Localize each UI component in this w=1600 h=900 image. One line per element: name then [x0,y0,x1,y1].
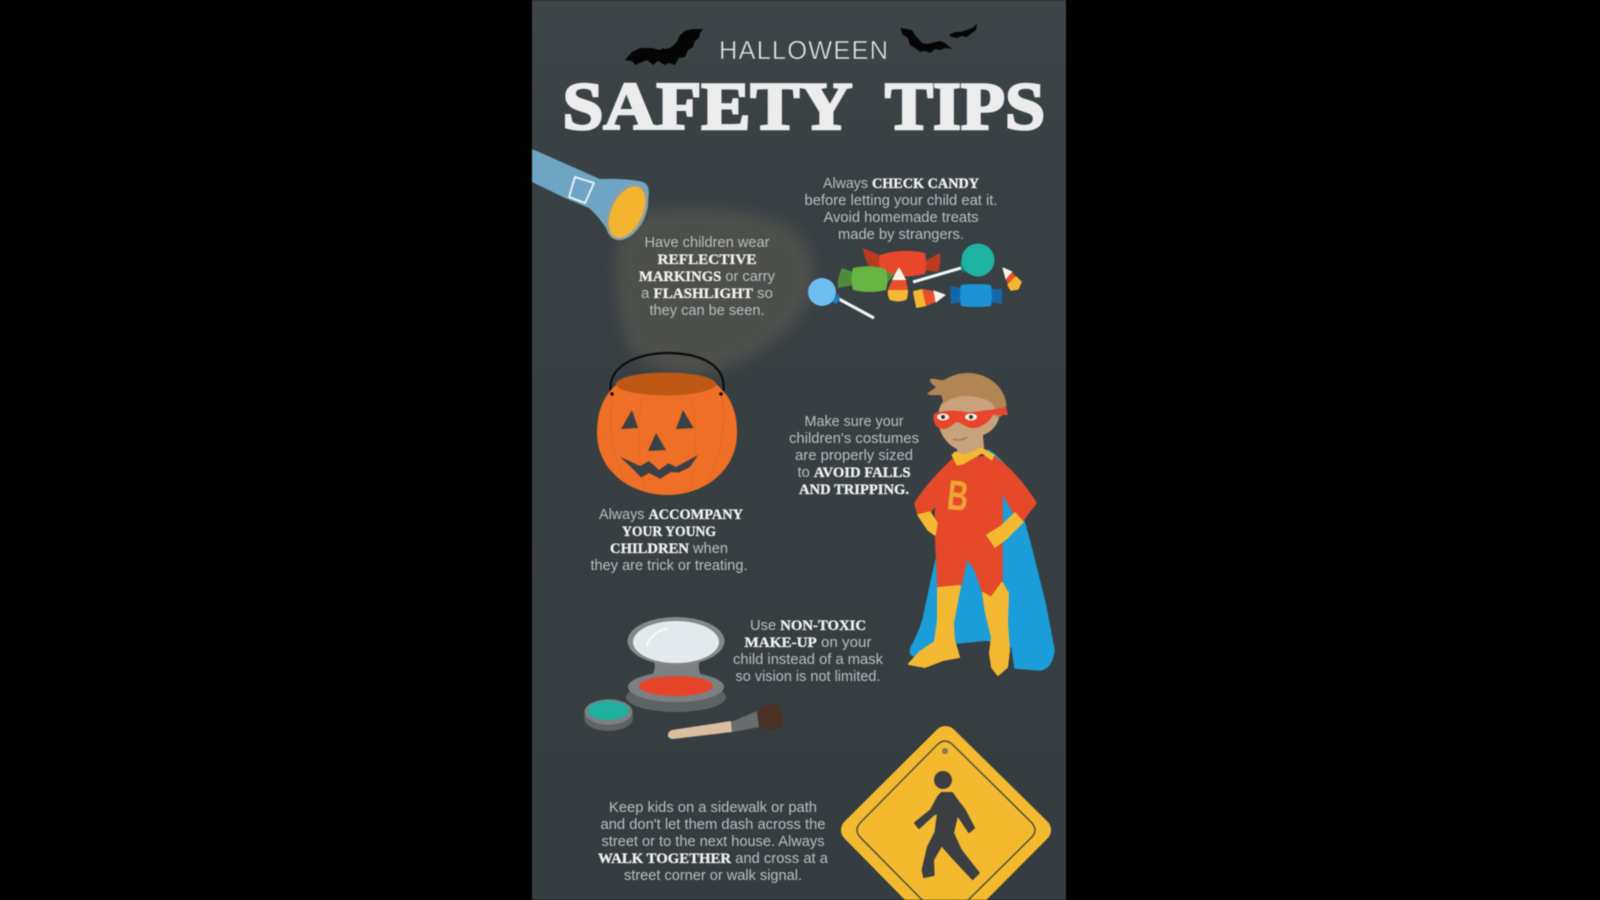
tip text: costumes: to AVOID FALLS [798,465,910,481]
tip text: non-toxic make-up [733,618,884,685]
tip text: reflective markings: Have children wear [644,235,770,251]
tip text: reflective markings [639,235,776,319]
icon: candy pile [808,244,1021,318]
candy corn middle [914,289,945,307]
boots [909,583,1009,675]
brush bristles [757,704,783,730]
tip text: walk together: and don't let them dash across the [600,817,826,833]
icon: small bat [949,24,977,38]
mirror [628,617,724,665]
teal lollipop [913,244,994,282]
tip text: costumes: children's costumes [789,431,919,447]
mask [933,407,1008,429]
pedestrian figure [915,771,979,879]
title: Safety Tips: TIPS [885,68,1045,144]
tip text: accompany young children: YOUR YOUNG [622,524,716,540]
hair [927,373,1006,417]
icon: makeup compact [584,617,783,739]
pumpkin face [620,410,698,479]
blue wrapped candy [950,284,1002,307]
smile [953,437,967,440]
blue lollipop [808,278,874,318]
tip text: accompany young children: CHILDREN when [610,541,728,557]
tip text: costumes [789,414,919,498]
title: Safety Tips [562,68,1045,144]
chest letter B: B [945,471,971,520]
brush ferrule [731,711,759,732]
icon: superhero child [909,373,1054,675]
tip text: accompany young children [590,507,748,574]
brush handle [668,721,732,739]
tip text: costumes: are properly sized [795,448,913,464]
tip text: reflective markings: a FLASHLIGHT so [641,286,773,302]
tip text: non-toxic make-up: Use NON-TOXIC [750,618,866,634]
tip text: walk together: Keep kids on a sidewalk or path [609,800,817,816]
tip text: non-toxic make-up: so vision is not limited. [736,669,880,685]
neck and face [938,392,1000,458]
tip text: walk together [598,800,829,884]
small teal pot [584,705,633,731]
tip text: walk together: WALK TOGETHER and cross at a [598,851,829,867]
green wrapped candy [838,266,895,292]
hinge [648,660,705,680]
tip text: accompany young children: Always ACCOMPANY [599,507,744,523]
icon: pedestrian crossing sign [853,738,1039,900]
icon: pumpkin bucket [597,353,737,495]
title: Safety Tips: SAFETY [562,68,852,144]
icon: medium bat [900,28,952,53]
tip text: check candy: Avoid homemade treats [824,210,978,226]
compact base [626,682,726,712]
tip text: check candy: before letting your child eat it. [804,193,998,209]
red wrapped candy [863,248,940,276]
tip text: reflective markings: REFLECTIVE [658,252,756,268]
tip text: walk together: street or to the next house. Always [602,834,824,850]
gloves [918,512,1023,547]
infographic canvas [531,0,1066,900]
tip text: reflective markings: they can be seen. [650,303,764,319]
panel background [532,0,1066,900]
eyes [937,414,977,420]
cape [910,450,1054,670]
collar [952,448,994,465]
tip text: reflective markings: MARKINGS or carry [639,269,776,285]
tip text: walk together: street corner or walk signal. [624,868,802,884]
tip text: check candy [804,176,998,243]
icon: flashlight [532,149,657,247]
tip text: costumes: Make sure your [804,414,904,430]
tip text: accompany young children: they are trick or treating. [590,558,748,574]
tip text: costumes: AND TRIPPING. [799,482,909,498]
candy corn left [888,269,908,302]
tip text: check candy: made by strangers. [838,227,964,243]
tip text: non-toxic make-up: MAKE-UP on your [744,635,872,651]
tip text: check candy: Always CHECK CANDY [823,176,980,192]
title: Halloween: HALLOWEEN [719,37,888,65]
flashlight beam [616,209,813,374]
icon: large bat [625,29,703,65]
suit [915,456,1036,598]
tip text: non-toxic make-up: child instead of a mask [733,652,884,668]
candy corn right [1003,268,1021,290]
